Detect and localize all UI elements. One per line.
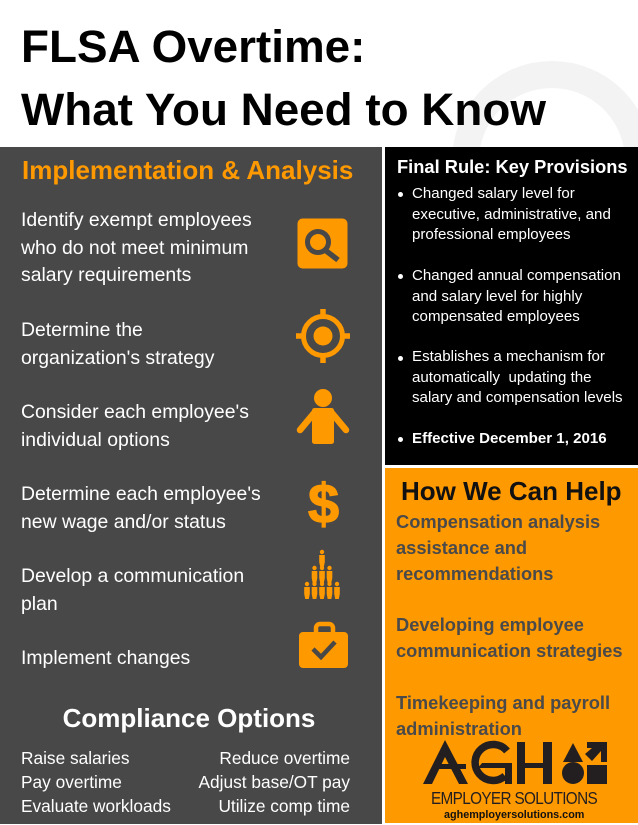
background arc	[453, 61, 638, 147]
compliance list left: Evaluate workloads	[21, 796, 171, 816]
step: communication plan	[21, 565, 244, 614]
icon: people pyramid	[304, 550, 340, 599]
provision: salary level: professional employees	[412, 226, 571, 243]
compliance list right: Utilize comp time	[218, 796, 350, 816]
provision: update mechanism	[412, 348, 623, 406]
icon: target	[296, 309, 350, 363]
step: determine strategy: Determine the	[21, 319, 143, 341]
logo website: aghemployersolutions.com	[444, 809, 584, 821]
provision: salary level	[412, 185, 611, 243]
help: employee communication: Developing employee	[396, 614, 584, 635]
help: timekeeping: administration	[396, 718, 522, 739]
provision: update mechanism: Establishes a mechanism for	[412, 348, 605, 365]
step: determine strategy: organization's strategy	[21, 346, 214, 368]
bullets	[398, 192, 403, 442]
provision: effective date: Effective December 1, 2016	[412, 430, 607, 447]
step: individual options: individual options	[21, 428, 170, 450]
step: wage and status	[21, 483, 261, 532]
step: implement changes: Implement changes	[21, 647, 190, 669]
heading: implementation and analysis: Implementation & Analysis	[22, 155, 353, 185]
provision: salary level: Changed salary level for	[412, 185, 575, 202]
compliance list right: Reduce overtime	[219, 748, 350, 768]
icon: magnifier	[298, 218, 348, 268]
logo tagline: EMPLOYER SOLUTIONS	[431, 788, 597, 808]
provision: update mechanism: salary and compensation levels	[412, 389, 623, 406]
panel: final rule key provisions	[385, 147, 638, 465]
heading: final rule key provisions: Final Rule: Key Provisions	[397, 156, 628, 177]
help: compensation analysis: recommendations	[396, 563, 553, 584]
compliance list left: Pay overtime	[21, 772, 122, 792]
compliance list right: Adjust base/OT pay	[199, 772, 350, 792]
panel: how we can help	[385, 468, 638, 823]
help: timekeeping	[396, 692, 610, 739]
compliance list right	[198, 748, 350, 816]
provision: annual compensation: compensated employees	[412, 308, 580, 325]
panel: implementation and analysis	[0, 147, 382, 824]
step: determine strategy	[21, 319, 214, 368]
icon: briefcase with check	[299, 622, 348, 668]
title: What You Need to Know	[21, 84, 546, 135]
compliance list left	[21, 748, 171, 816]
help: timekeeping: Timekeeping and payroll	[396, 692, 610, 713]
step: identify exempt employees	[21, 209, 252, 286]
title: FLSA Overtime:	[21, 21, 365, 72]
step: communication plan: Develop a communication	[21, 565, 244, 587]
help: compensation analysis: assistance and	[396, 537, 527, 558]
help: employee communication	[396, 614, 623, 661]
heading: compliance options: Compliance Options	[63, 703, 315, 733]
provision: annual compensation: Changed annual compensation	[412, 267, 621, 284]
step: identify exempt employees: who do not meet minimum	[21, 236, 248, 258]
provision: update mechanism: automatically updating the	[412, 369, 592, 386]
help: compensation analysis: Compensation analysis	[396, 511, 600, 532]
help: compensation analysis	[396, 511, 600, 584]
step: individual options: Consider each employee's	[21, 401, 249, 423]
step: communication plan: plan	[21, 592, 58, 614]
provision: salary level: executive, administrative, and	[412, 206, 611, 223]
icon: dollar sign: $	[308, 472, 339, 535]
step: individual options	[21, 401, 249, 450]
icon: person	[296, 389, 350, 444]
compliance list left: Raise salaries	[21, 748, 130, 768]
logo: AGH employer solutions	[423, 740, 607, 821]
help: employee communication: communication strategies	[396, 640, 623, 661]
step: wage and status: Determine each employee's	[21, 483, 261, 505]
step: identify exempt employees: salary requirements	[21, 264, 191, 286]
provision: annual compensation: and salary level for highly	[412, 288, 582, 305]
provision: annual compensation	[412, 267, 621, 325]
title	[21, 21, 546, 135]
step: wage and status: new wage and/or status	[21, 510, 226, 532]
step: identify exempt employees: Identify exempt employees	[21, 209, 252, 231]
heading: how we can help: How We Can Help	[401, 476, 622, 506]
